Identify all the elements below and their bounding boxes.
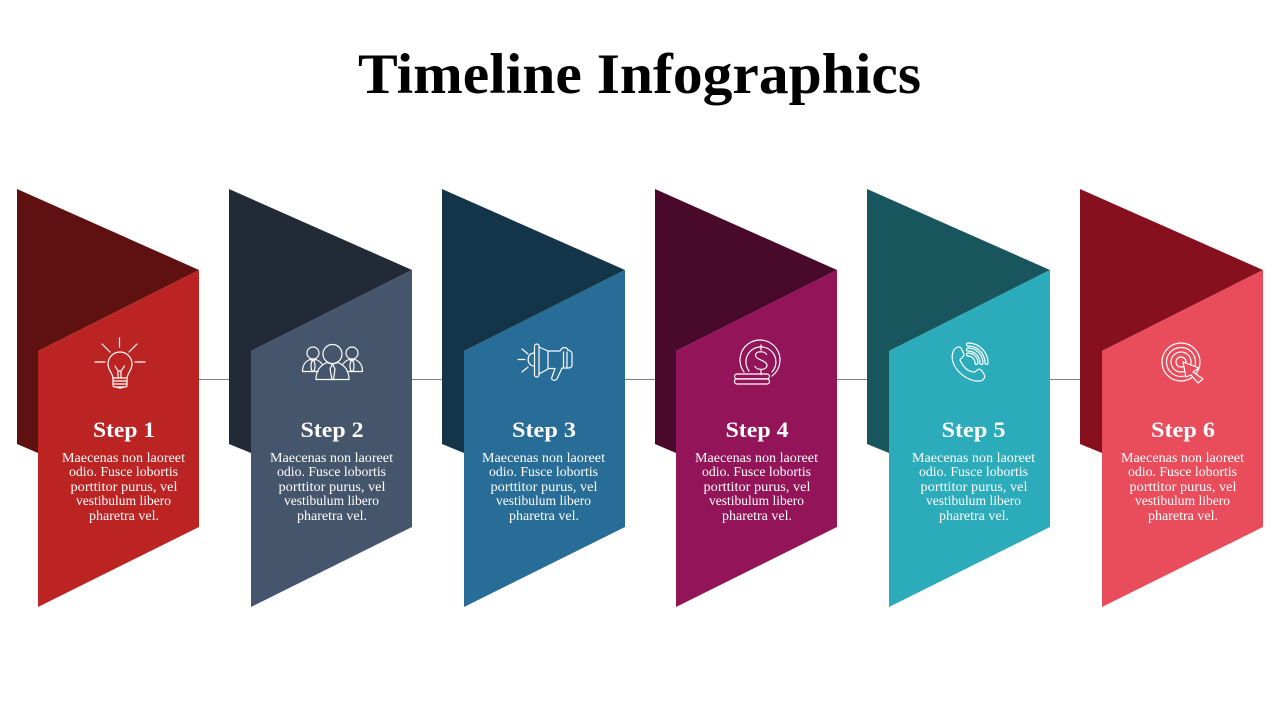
text: step 4 description: vestibulum libero	[709, 493, 804, 508]
text: step 2 description: Maecenas non laoreet	[270, 450, 393, 465]
front shape: step 6	[1102, 270, 1263, 607]
text: step 4 description: odio. Fusce lobortis	[702, 464, 811, 479]
text: step 6 description	[1121, 450, 1244, 523]
panel: step 2	[229, 189, 412, 607]
text: step 4 description: pharetra vel.	[722, 508, 792, 523]
icon: team of people	[302, 344, 362, 380]
text: step 6 description: pharetra vel.	[1148, 508, 1218, 523]
text: step 3 description: pharetra vel.	[509, 508, 579, 523]
heading: step 1: Step 1	[93, 417, 155, 442]
text: step 2 description: vestibulum libero	[284, 493, 379, 508]
back shape: step 3	[442, 189, 625, 453]
text: step 4 description: porttitor purus, vel	[704, 479, 811, 494]
panel: step 4	[655, 189, 837, 607]
text: step 1 description: Maecenas non laoreet	[62, 450, 185, 465]
front shape: step 4	[676, 270, 837, 607]
text: step 5 description	[912, 450, 1035, 523]
text: step 1 description	[62, 450, 185, 523]
text: step 5 description: vestibulum libero	[926, 493, 1021, 508]
panel: step 1	[17, 189, 199, 607]
back shape: step 5	[867, 189, 1050, 453]
icon: light bulb	[95, 338, 145, 388]
text: step 2 description: porttitor purus, vel	[278, 479, 386, 494]
text: step 1 description: vestibulum libero	[76, 493, 171, 508]
text: step 3 description: vestibulum libero	[496, 493, 591, 508]
text: step 2 description: pharetra vel.	[297, 508, 367, 523]
front shape: step 2	[251, 270, 412, 607]
text: step 3 description: odio. Fusce lobortis	[489, 464, 598, 479]
text: step 5 description: Maecenas non laoreet	[912, 450, 1035, 465]
icon: target with cursor	[1162, 343, 1203, 383]
text: step 6 description: odio. Fusce lobortis	[1128, 464, 1237, 479]
heading: step 6: Step 6	[1151, 417, 1215, 442]
icon: dollar coin stack	[734, 340, 780, 384]
heading: step 2: Step 2	[300, 417, 364, 442]
heading: step 3: Step 3	[512, 417, 576, 442]
icon: megaphone	[518, 344, 572, 380]
panel: step 3	[442, 189, 625, 607]
text: step 5 description: porttitor purus, vel	[920, 479, 1028, 494]
front shape: step 1	[38, 270, 199, 607]
text: step 3 description: Maecenas non laoreet	[482, 450, 605, 465]
back shape: step 6	[1080, 189, 1263, 453]
text: step 3 description: porttitor purus, vel	[490, 479, 598, 494]
front shape: step 3	[464, 270, 625, 607]
text: step 2 description	[270, 450, 393, 523]
text: step 1 description: pharetra vel.	[89, 508, 159, 523]
panel: step 5	[867, 189, 1050, 607]
panel: step 6	[1080, 189, 1263, 607]
text: step 3 description	[482, 450, 605, 523]
text: step 5 description: odio. Fusce lobortis	[919, 464, 1028, 479]
timeline connector line	[190, 378, 1090, 380]
back shape: step 4	[655, 189, 837, 453]
text: step 5 description: pharetra vel.	[939, 508, 1009, 523]
text: step 1 description: porttitor purus, vel	[70, 479, 178, 494]
text: step 1 description: odio. Fusce lobortis	[69, 464, 178, 479]
back shape: step 2	[229, 189, 412, 453]
text: step 4 description	[695, 450, 818, 523]
heading: step 5: Step 5	[942, 417, 1006, 442]
text: step 6 description: porttitor purus, vel	[1130, 479, 1237, 494]
title: Timeline Infographics	[358, 43, 921, 106]
icon: phone with signal	[952, 343, 988, 381]
text: step 6 description: Maecenas non laoreet	[1121, 450, 1244, 465]
back shape: step 1	[17, 189, 199, 453]
text: step 2 description: odio. Fusce lobortis	[277, 464, 386, 479]
front shape: step 5	[889, 270, 1050, 607]
text: step 6 description: vestibulum libero	[1135, 493, 1230, 508]
heading: step 4: Step 4	[726, 417, 788, 442]
text: step 4 description: Maecenas non laoreet	[695, 450, 818, 465]
